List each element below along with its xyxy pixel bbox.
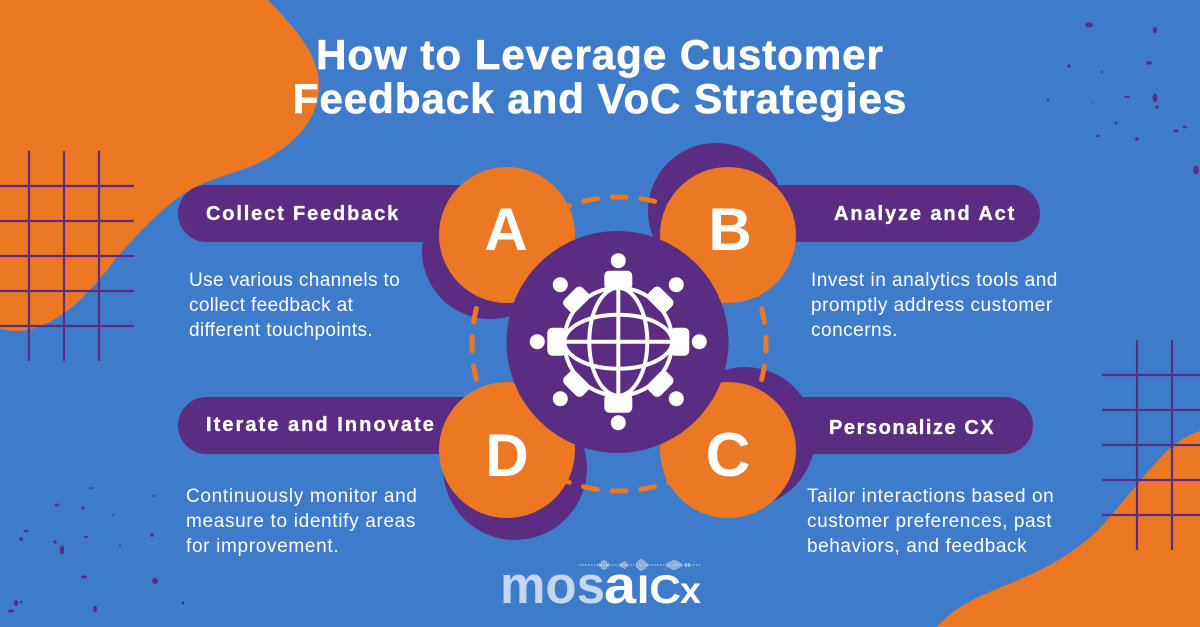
text: Personalize CX body: Tailor interactions based on (807, 486, 1054, 507)
letters: B (708, 196, 752, 263)
letters: D (485, 422, 529, 489)
dashed ring (472, 197, 766, 491)
text: Analyze and Act body (811, 270, 1058, 341)
speckles top right (1047, 22, 1199, 174)
heading: Iterate and Innovate: Iterate and Innovate (206, 414, 436, 436)
logo text: a (604, 556, 637, 615)
central circle (506, 231, 728, 453)
letters (484, 196, 752, 490)
text: Iterate and Innovate body: measure to identify areas (186, 511, 416, 532)
heading: Collect Feedback: Collect Feedback (206, 203, 400, 225)
letters: A (484, 196, 528, 263)
orange blob top left (0, 0, 319, 331)
text: Personalize CX body (807, 486, 1054, 557)
letters: C (706, 421, 750, 490)
logo text: IC (637, 568, 681, 612)
text: Analyze and Act body: promptly address customer (811, 295, 1053, 316)
text: Iterate and Innovate body: Continuously monitor and (186, 486, 418, 507)
text: Personalize CX body: customer preferences, past (807, 511, 1052, 532)
heading: Personalize CX: Personalize CX (829, 417, 995, 439)
logo text: mos (500, 556, 605, 615)
circle shadows (422, 143, 815, 540)
text: Personalize CX body: behaviors, and feedback (807, 536, 1027, 557)
text: Collect Feedback body: different touchpoints. (189, 320, 373, 341)
label pills (178, 185, 1040, 454)
orange blob bottom right (937, 431, 1200, 627)
logo text: x (680, 570, 701, 611)
orange circles (439, 167, 796, 518)
text: Iterate and Innovate body (186, 486, 418, 557)
logo waveform (579, 559, 700, 571)
text: Collect Feedback body (189, 270, 400, 341)
grid lines right (1102, 340, 1200, 550)
title: How to Leverage Customer (316, 31, 884, 78)
title (293, 31, 907, 122)
logo text (500, 556, 701, 615)
grid lines left (0, 151, 134, 361)
speckles bottom left (7, 487, 185, 612)
title: Feedback and VoC Strategies (293, 75, 907, 122)
heading: Analyze and Act: Analyze and Act (834, 203, 1016, 225)
text: Iterate and Innovate body: for improvement. (186, 536, 339, 557)
text: Analyze and Act body: concerns. (811, 320, 898, 341)
text: Analyze and Act body: Invest in analytics tools and (811, 270, 1058, 291)
text: Collect Feedback body: Use various channels to (189, 270, 400, 291)
text: Collect Feedback body: collect feedback at (189, 295, 353, 316)
icon: globe with people (530, 253, 707, 430)
